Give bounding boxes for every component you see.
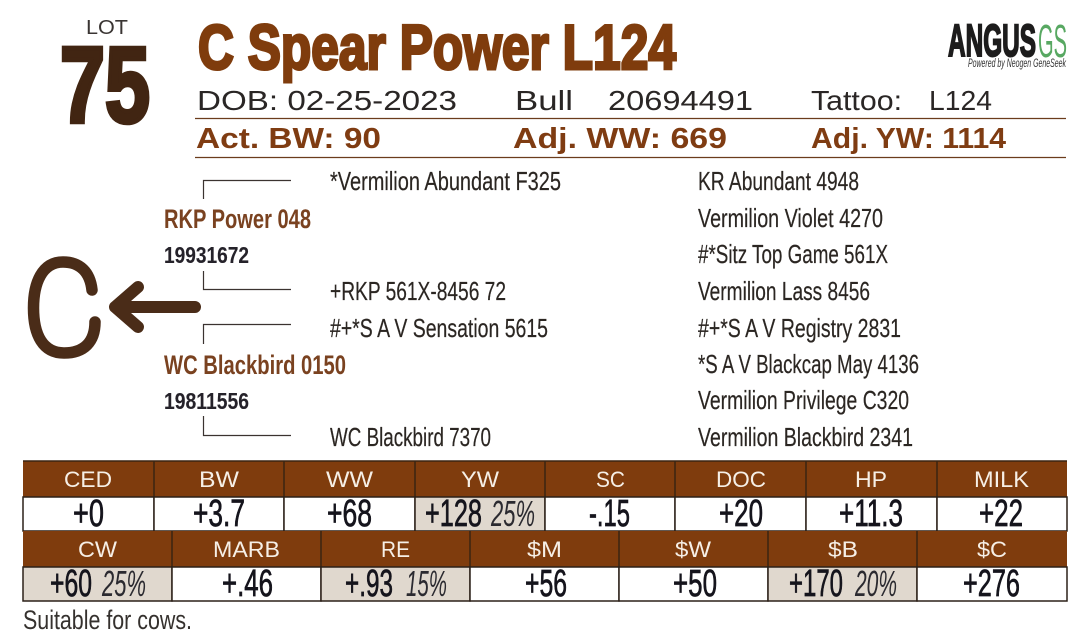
EPD table row 2: $W xyxy=(675,537,711,562)
animal info line: L124 xyxy=(929,85,992,116)
EPD table row 1: YW xyxy=(461,467,499,492)
EPD table row 2: +60 xyxy=(50,563,92,605)
EPD table row 1: HP xyxy=(855,467,887,492)
great-grandparents: #*Sitz Top Game 561X xyxy=(698,239,888,269)
dam: WC Blackbird 0150 xyxy=(164,350,346,380)
EPD table row 1: +20 xyxy=(719,493,763,535)
EPD table row 1: 25% xyxy=(490,493,535,534)
footnote: Suitable for cows. xyxy=(23,605,192,635)
weights line: Adj. WW: 669 xyxy=(513,123,727,155)
EPD table row 1: +68 xyxy=(327,493,372,535)
animal info line: 20694491 xyxy=(608,85,753,116)
animal info line: Tattoo: xyxy=(811,85,902,116)
EPD table row 2: +50 xyxy=(673,563,717,605)
EPD table row 1: +128 xyxy=(425,493,482,535)
animal info line xyxy=(197,85,992,116)
EPD table row 1: WW xyxy=(326,467,373,492)
EPD table row 2: 20% xyxy=(854,563,897,604)
great-grandparents: Vermilion Lass 8456 xyxy=(698,276,870,306)
EPD table row 2: +276 xyxy=(963,563,1020,605)
EPD table row 2: $B xyxy=(828,537,858,562)
EPD table row 1: +22 xyxy=(979,493,1023,535)
EPD table row 2 xyxy=(23,531,1067,605)
EPD table row 2: +170 xyxy=(789,563,843,605)
EPD table row 2: 25% xyxy=(101,563,146,604)
great-grandparents: #+*S A V Registry 2831 xyxy=(698,313,901,343)
dam: 19811556 xyxy=(164,388,249,414)
weights line xyxy=(196,123,1006,155)
great-grandparents: Vermilion Privilege C320 xyxy=(698,385,909,415)
weights line: Act. BW: 90 xyxy=(196,123,381,155)
EPD table row 1: DOC xyxy=(716,467,766,492)
EPD table row 2: +.93 xyxy=(345,563,393,605)
EPD table row 1: +3.7 xyxy=(193,493,245,535)
icon: C brand xyxy=(34,262,95,353)
great-grandparents: Vermilion Violet 4270 xyxy=(698,203,883,233)
EPD table row 2: RE xyxy=(381,537,410,562)
animal info line: Bull xyxy=(515,85,573,116)
sire: 19931672 xyxy=(164,242,249,268)
EPD table row 2: +56 xyxy=(525,563,567,605)
EPD table row 1: +11.3 xyxy=(839,493,903,535)
grandparents: *Vermilion Abundant F325 xyxy=(330,166,561,196)
grandparents: +RKP 561X-8456 72 xyxy=(330,276,506,306)
EPD table row 2: +.46 xyxy=(222,563,273,605)
EPD table row 1: CED xyxy=(64,467,112,492)
EPD table row 1: -.15 xyxy=(589,493,630,535)
lot label: LOT xyxy=(86,17,128,39)
grandparents xyxy=(330,166,561,452)
dam xyxy=(164,350,346,414)
great-grandparents: KR Abundant 4948 xyxy=(698,166,859,196)
weights line: Adj. YW: 1114 xyxy=(811,123,1006,155)
grandparents: #+*S A V Sensation 5615 xyxy=(330,313,548,343)
EPD table row 2: $C xyxy=(977,537,1007,562)
EPD table row 1: SC xyxy=(596,467,625,492)
EPD table row 1: +0 xyxy=(73,493,104,535)
EPD table row 1 xyxy=(23,461,1067,535)
EPD table row 2: 15% xyxy=(406,563,447,604)
EPD table row 2: CW xyxy=(78,537,117,562)
title: C Spear Power L124 xyxy=(198,13,676,83)
great-grandparents xyxy=(698,166,919,452)
pedigree brackets xyxy=(204,180,291,436)
EPD table row 2: $M xyxy=(527,537,562,562)
sire xyxy=(164,204,311,268)
EPD table row 1: BW xyxy=(199,467,239,492)
grandparents: WC Blackbird 7370 xyxy=(330,422,491,452)
animal info line: DOB: 02-25-2023 xyxy=(197,85,457,116)
sire: RKP Power 048 xyxy=(164,204,311,234)
lot number: 75 xyxy=(60,24,150,145)
arrow xyxy=(115,287,195,327)
EPD table row 1: MILK xyxy=(974,467,1029,492)
EPD table row 2: MARB xyxy=(213,537,280,562)
great-grandparents: Vermilion Blackbird 2341 xyxy=(698,422,913,452)
great-grandparents: *S A V Blackcap May 4136 xyxy=(698,349,919,379)
